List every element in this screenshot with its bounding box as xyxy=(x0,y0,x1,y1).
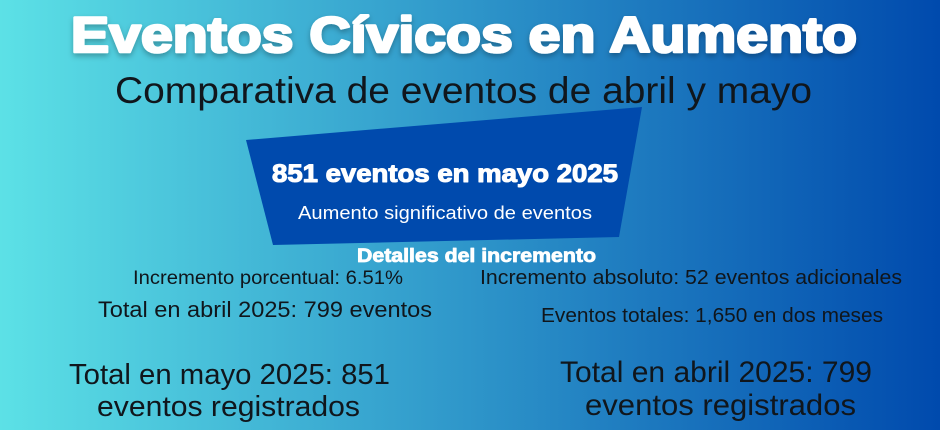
detail: April total: Total en abril 2025: 799 eventos xyxy=(98,297,432,322)
title: Eventos Cívicos en Aumento xyxy=(71,7,857,63)
panel: highlight xyxy=(246,107,642,245)
subtitle: Comparativa de eventos de abril y mayo xyxy=(115,70,812,111)
highlight caption: Aumento significativo de eventos xyxy=(298,203,592,223)
summary: April total xyxy=(560,356,872,422)
summary: May total: eventos registrados xyxy=(97,391,360,423)
summary: May total: Total en mayo 2025: 851 xyxy=(69,359,390,391)
detail: absolute increase: Incremento absoluto: 52 eventos adicionales xyxy=(480,267,902,289)
panel background shape xyxy=(246,107,642,245)
detail: percentage increase: Incremento porcentual: 6.51% xyxy=(133,268,403,289)
summary: April total: eventos registrados xyxy=(585,389,856,422)
headline stat: 851 eventos en mayo 2025 xyxy=(272,160,618,188)
section heading: details: Detalles del incremento xyxy=(357,246,596,267)
detail: two-month total: Eventos totales: 1,650 en dos meses xyxy=(541,305,883,327)
summary: April total: Total en abril 2025: 799 xyxy=(560,356,872,389)
summary: May total xyxy=(69,359,390,423)
